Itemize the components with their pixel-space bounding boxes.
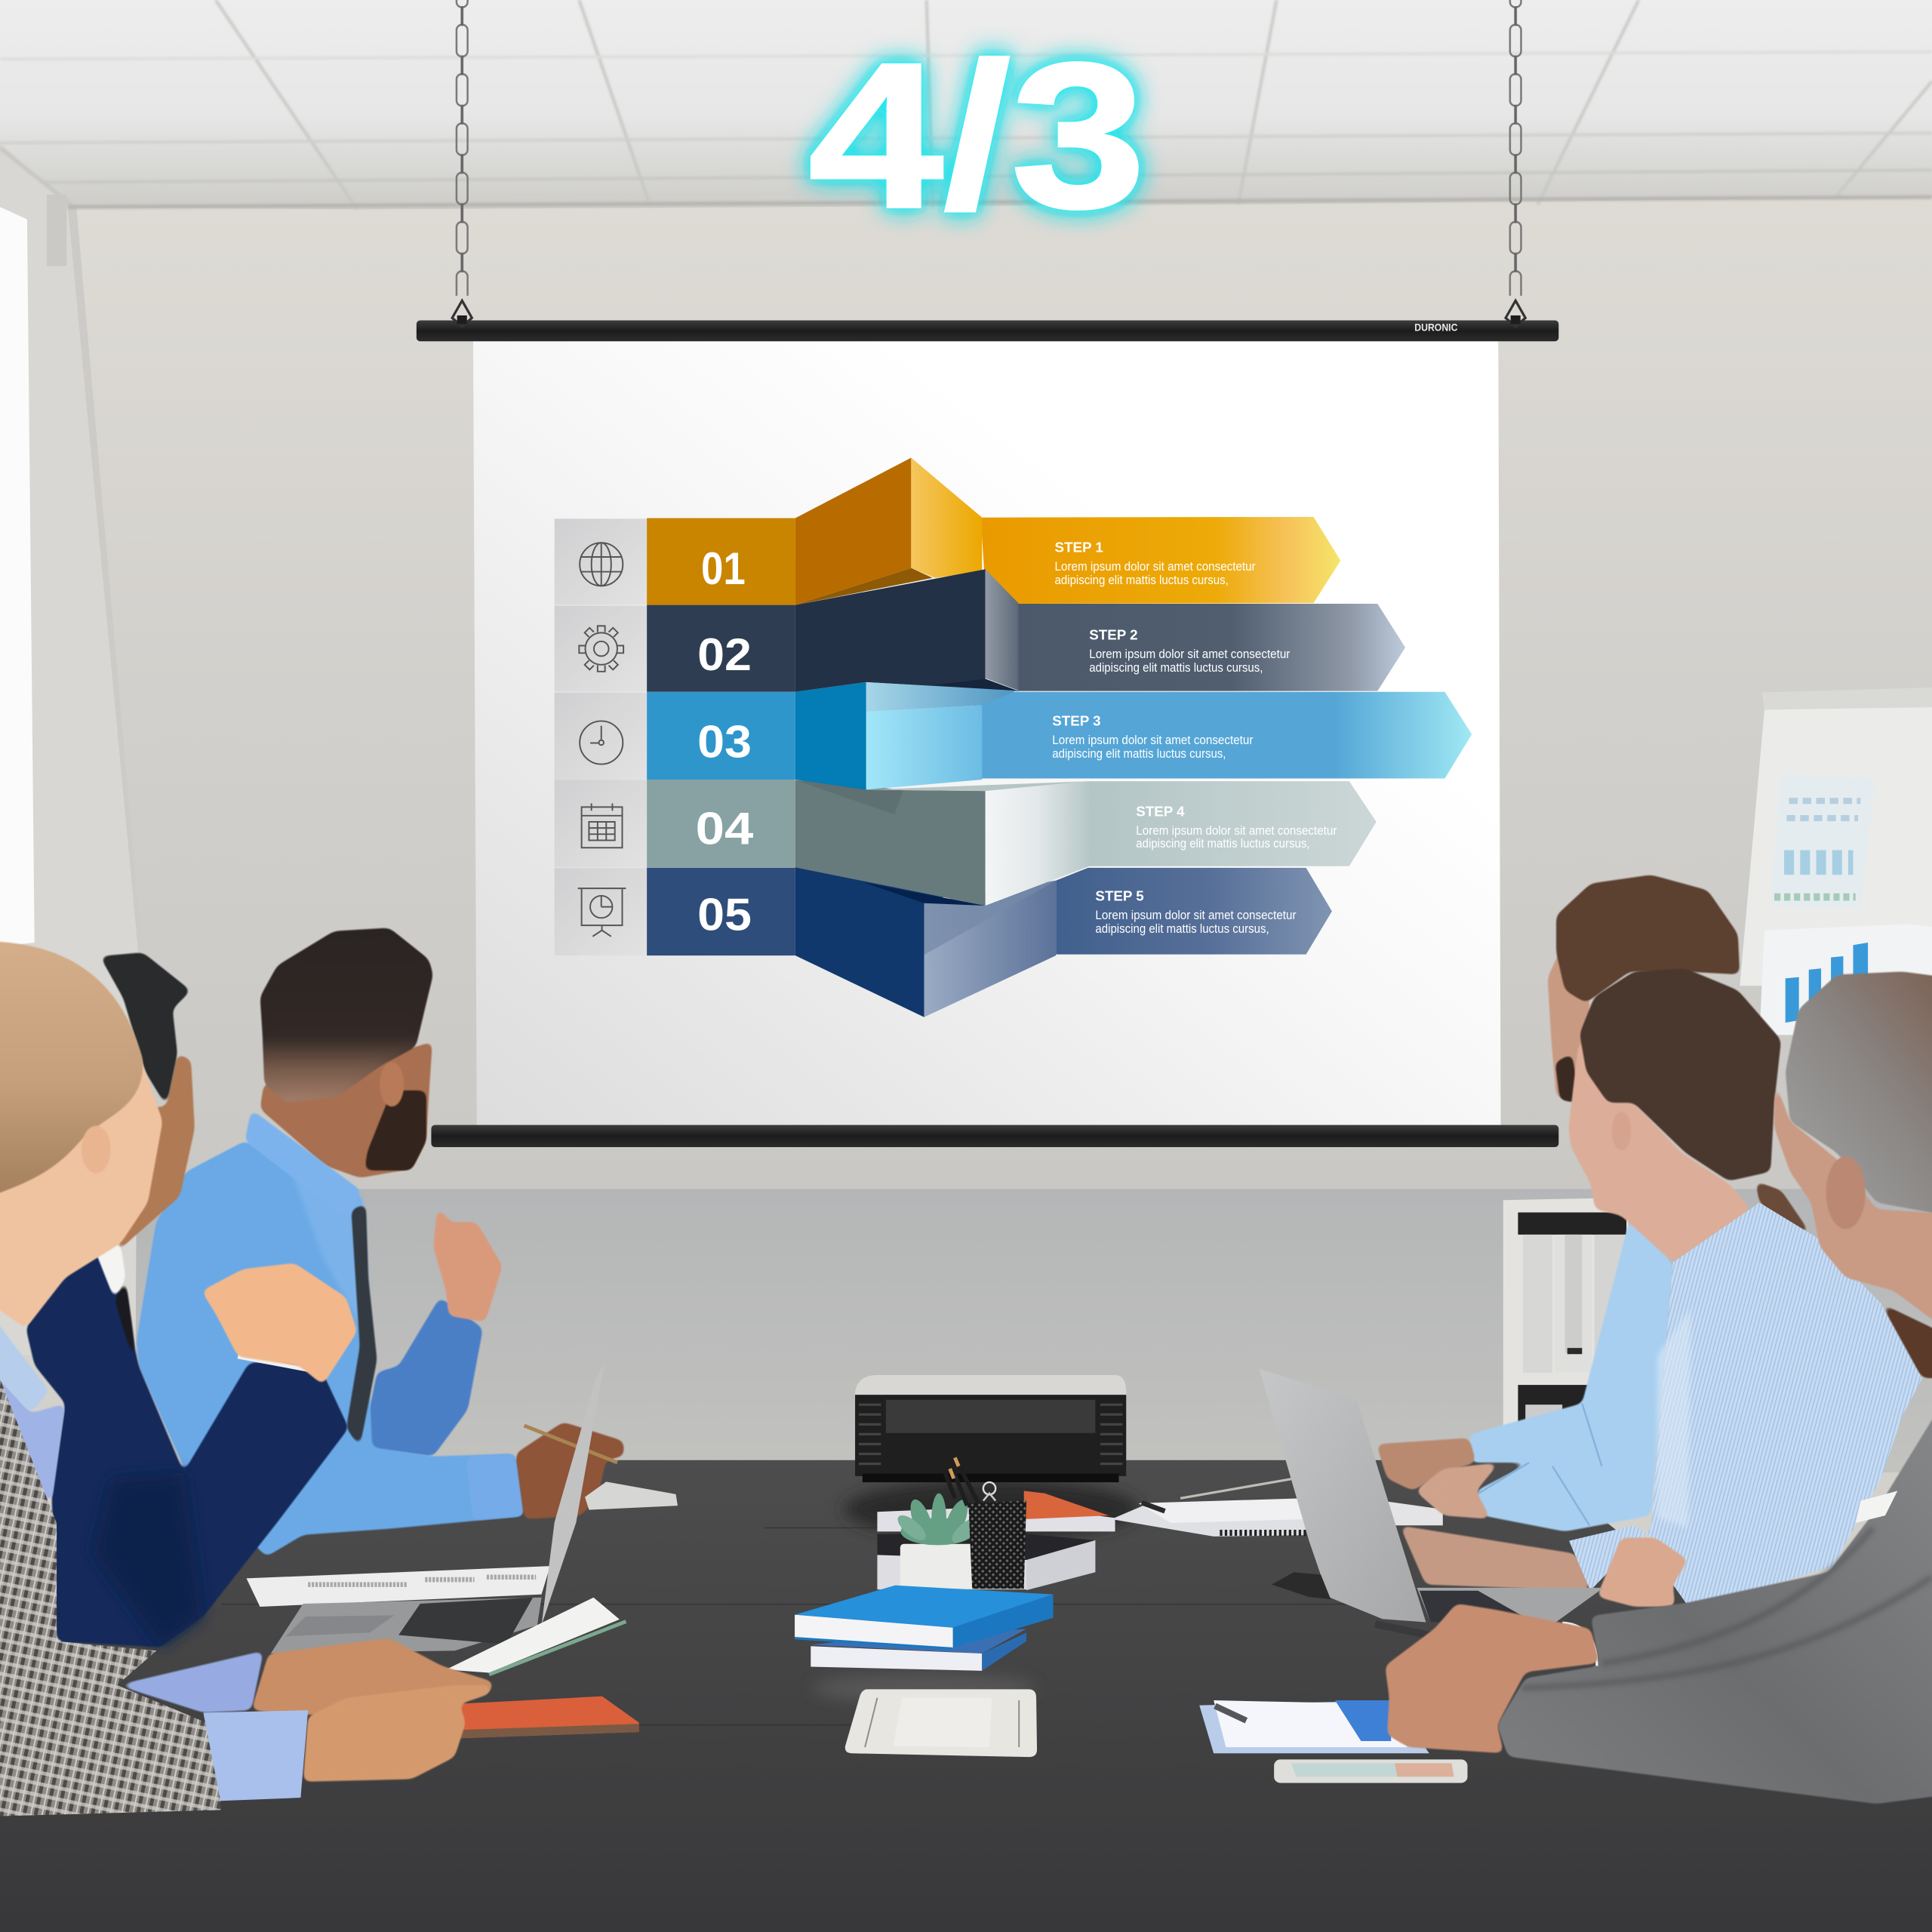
lower cuff <box>203 1710 308 1801</box>
step 1 text: Lorem ipsum dolor sit amet consectetur <box>1055 559 1256 574</box>
lid <box>1260 1369 1426 1623</box>
step 3 text: Lorem ipsum dolor sit amet consectetur <box>1052 733 1254 747</box>
collar <box>245 1109 361 1219</box>
step 3 text <box>1052 713 1254 761</box>
man with brown hair, right <box>1377 875 1740 1531</box>
row 4: 04: 04 <box>696 802 754 854</box>
ceiling <box>0 0 1932 210</box>
face <box>1548 940 1589 1109</box>
row 5: 05 <box>555 866 1332 1017</box>
hand with pen <box>515 1422 624 1519</box>
step 2 text <box>1089 626 1291 675</box>
neck and face <box>0 1051 163 1328</box>
conference table <box>0 1460 1932 1932</box>
left hanging chain <box>452 0 472 327</box>
base <box>271 1598 542 1654</box>
fist <box>202 1263 357 1385</box>
man in blue shirt, left <box>137 928 624 1557</box>
arrow: step 1 <box>981 517 1340 604</box>
row 1: 01 <box>555 458 1340 605</box>
upper hand <box>251 1638 494 1715</box>
step 1 text <box>1055 539 1256 587</box>
white shirt cuff <box>238 1357 310 1371</box>
lower book <box>811 1629 1026 1671</box>
orange folder <box>459 1697 639 1738</box>
shirt <box>0 1353 66 1503</box>
bottom weight bar <box>431 1125 1558 1147</box>
shirt <box>1469 1219 1673 1531</box>
right hanging chain <box>1506 0 1525 327</box>
row 2: 02 <box>555 569 1405 692</box>
lid <box>542 1363 605 1625</box>
hair <box>260 928 433 1103</box>
ponytail <box>1755 1181 1811 1235</box>
step 1 text: STEP 1 <box>1055 539 1103 555</box>
woman with blond hair <box>0 941 639 1817</box>
step 4 text: adipiscing elit mattis luctus cursus, <box>1136 836 1310 851</box>
screen surface <box>473 335 1501 1131</box>
icon: presentation board <box>578 888 626 937</box>
title: 4/3: 4/3 <box>808 20 1146 251</box>
plant pot <box>894 1494 984 1588</box>
step 3 text: adipiscing elit mattis luctus cursus, <box>1052 746 1226 761</box>
dark hair of woman behind <box>1881 1303 1932 1378</box>
stacked blue books <box>795 1586 1053 1671</box>
back wall <box>0 197 1932 1195</box>
clip behind lid <box>1272 1572 1331 1599</box>
window <box>0 207 35 946</box>
row 2: 02: 02 <box>697 629 752 680</box>
step 4 text <box>1136 803 1337 851</box>
lower shaded wall <box>136 1189 1932 1472</box>
hands <box>1377 1438 1500 1519</box>
step 3 text: STEP 3 <box>1052 713 1101 729</box>
lower hand <box>303 1685 491 1782</box>
wall vent <box>47 195 66 266</box>
clipboard in hand <box>446 1598 620 1672</box>
step 5 text: adipiscing elit mattis luctus cursus, <box>1095 921 1269 936</box>
woman with brown hair, right <box>1400 968 1922 1609</box>
beard <box>365 1091 426 1171</box>
hair <box>1786 971 1932 1220</box>
row 3: 03 <box>555 682 1472 790</box>
suit <box>26 1247 349 1647</box>
face <box>117 1054 195 1253</box>
ear <box>1612 1110 1632 1152</box>
succulent <box>894 1494 984 1547</box>
step 1 text: adipiscing elit mattis luctus cursus, <box>1055 573 1229 587</box>
icon: calendar <box>582 803 622 848</box>
ear <box>1826 1155 1866 1229</box>
collar <box>0 1294 49 1414</box>
pencil cup <box>943 1457 1026 1589</box>
plaid jacket <box>0 1379 220 1817</box>
background shelf with binders <box>1503 1198 1629 1461</box>
white tablet <box>845 1689 1037 1757</box>
row 5: 05: 05 <box>697 889 752 940</box>
shirt cuff <box>1562 1623 1597 1666</box>
face and neck <box>1774 1078 1932 1349</box>
left laptop and papers <box>247 1363 605 1654</box>
chart sheet <box>1770 774 1875 909</box>
projector screen <box>417 320 1558 1147</box>
tie <box>346 1203 377 1447</box>
step 4 text: STEP 4 <box>1136 803 1185 819</box>
cuff <box>466 1454 525 1521</box>
arrow: step 4 <box>1088 781 1377 866</box>
icon: gear <box>579 626 623 672</box>
infographic <box>555 458 1472 1017</box>
striped shirt <box>1569 1202 1922 1609</box>
shirt <box>137 1141 525 1557</box>
hair <box>0 941 143 1201</box>
ear <box>380 1061 405 1108</box>
raised fist <box>433 1206 503 1322</box>
hair <box>1556 875 1740 1003</box>
back books and orange notebook <box>877 1491 1115 1590</box>
arrow: step 2 <box>1018 604 1405 691</box>
shirt collar <box>94 1244 126 1300</box>
upper book <box>795 1586 1053 1648</box>
hand <box>1385 1604 1599 1753</box>
man in navy suit <box>26 952 357 1647</box>
step 5 text <box>1095 888 1297 936</box>
forearm <box>1400 1525 1591 1591</box>
hair <box>100 952 191 1106</box>
keyboard <box>1420 1591 1539 1625</box>
upper cuff <box>117 1651 263 1712</box>
step 2 text: STEP 2 <box>1089 626 1138 642</box>
projector <box>855 1375 1126 1482</box>
keyboard <box>398 1598 533 1644</box>
phone <box>1274 1759 1467 1783</box>
trackpad <box>286 1615 394 1636</box>
right clipboard with blue notebook <box>1199 1700 1429 1753</box>
white shirt tab <box>1856 1491 1897 1523</box>
right laptop <box>1260 1369 1604 1636</box>
icon: globe <box>580 543 623 586</box>
brand mark: DURONIC <box>1414 321 1457 333</box>
face and neck <box>1568 1034 1751 1263</box>
neck and face <box>260 1041 432 1178</box>
arrow: step 3 <box>981 692 1472 779</box>
older man in gray suit, right <box>1385 971 1932 1804</box>
base <box>1417 1588 1604 1625</box>
side wall <box>0 142 138 1355</box>
top roller bar <box>417 320 1558 341</box>
step 4 text: Lorem ipsum dolor sit amet consectetur <box>1136 823 1337 838</box>
clipboards and notebook <box>1112 1478 1443 1537</box>
papers <box>247 1566 550 1607</box>
row 1: 01: 01 <box>701 543 746 594</box>
hair <box>1580 968 1781 1181</box>
ear <box>82 1125 111 1174</box>
other arm <box>361 1297 483 1457</box>
step 2 text: Lorem ipsum dolor sit amet consectetur <box>1089 647 1291 661</box>
step 5 text: STEP 5 <box>1095 888 1144 903</box>
bar chart sheet <box>1759 924 1932 1035</box>
row 3: 03: 03 <box>697 715 752 767</box>
hand <box>1597 1538 1688 1607</box>
icon: clock <box>580 721 623 764</box>
step 5 text: Lorem ipsum dolor sit amet consectetur <box>1095 908 1297 922</box>
row 4: 04 <box>555 780 1377 906</box>
flipchart in background <box>1740 688 1932 1035</box>
clipboard under left hand <box>585 1481 678 1510</box>
arrow: step 5 <box>1056 868 1332 955</box>
step 2 text: adipiscing elit mattis luctus cursus, <box>1089 660 1263 675</box>
suit <box>1497 1355 1932 1804</box>
